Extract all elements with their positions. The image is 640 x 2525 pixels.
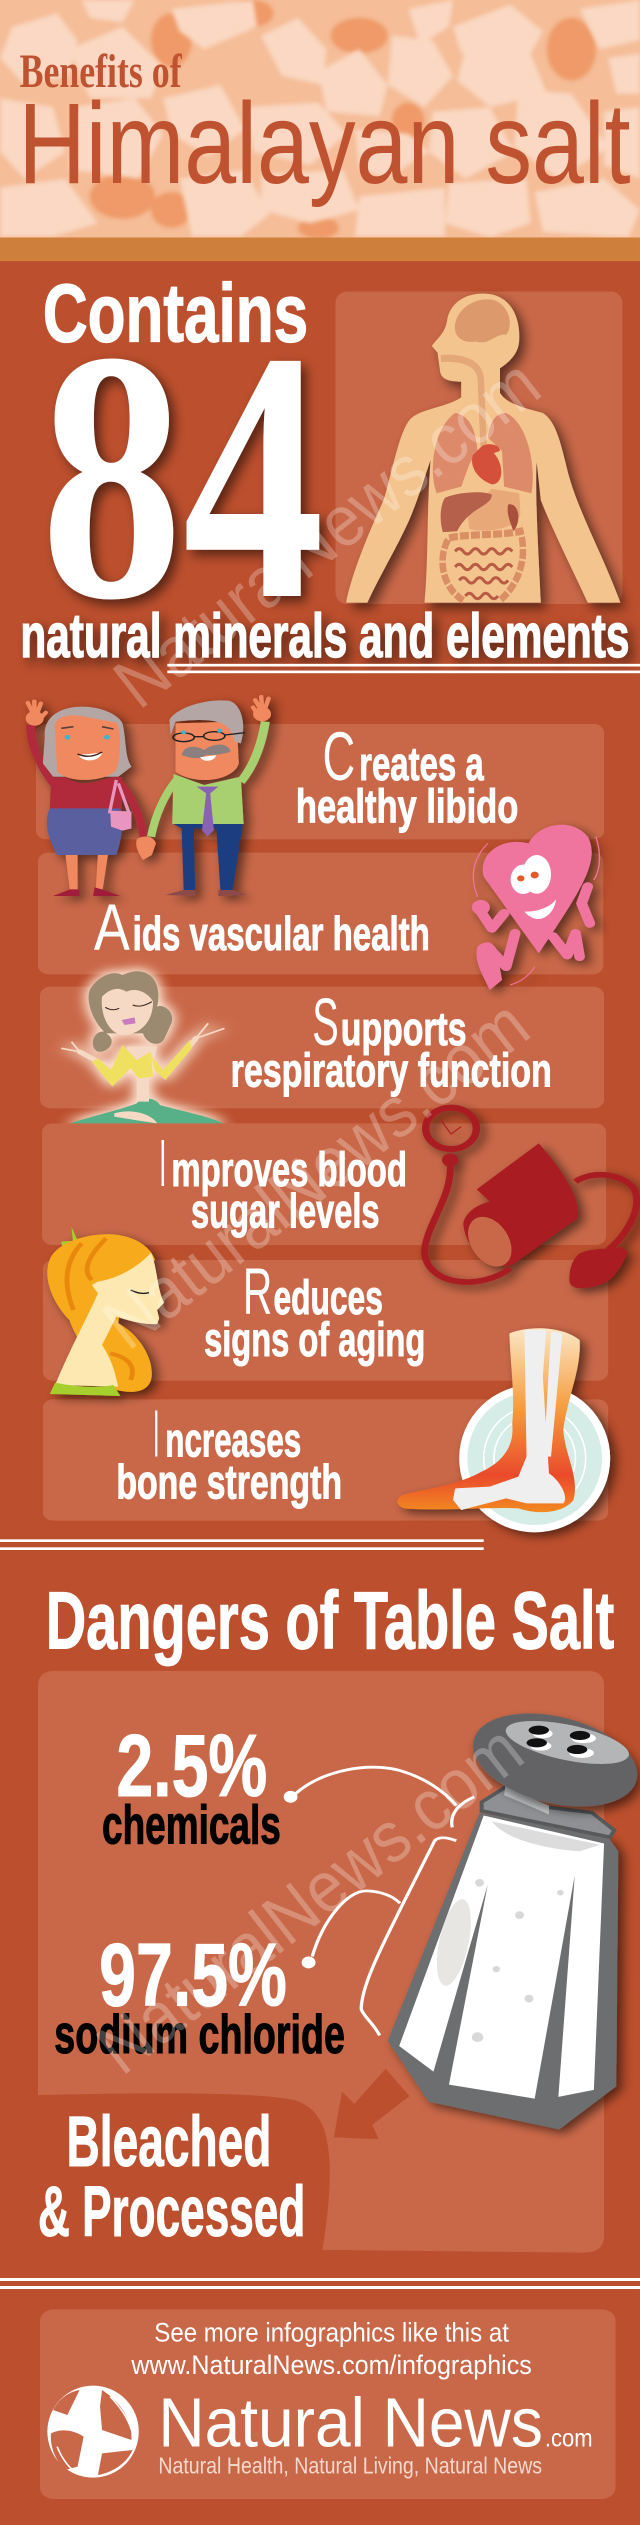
- watermark 3: NaturalNews.com: [83, 1710, 538, 2090]
- text: Supports respiratory function: upports: [341, 1003, 467, 1056]
- text: Aids vascular health: A: [94, 891, 130, 964]
- panel: respiratory row: [40, 987, 604, 1108]
- panel: dangers backdrop: [38, 1671, 604, 2253]
- footer section: [0, 2102, 640, 2499]
- text: Reduces signs of aging: [204, 1254, 425, 1367]
- text: Bleached: Bleached: [67, 2102, 271, 2181]
- stat: 2.5% chemicals: [102, 1717, 281, 1855]
- panel: aging row: [43, 1260, 608, 1381]
- panel: blood sugar row: [42, 1123, 606, 1245]
- title: Benefits of: Benefits of: [20, 45, 182, 97]
- benefit rows, part two: [0, 1108, 637, 1550]
- panel: bone row: [43, 1399, 608, 1521]
- text: Increases bone strength: [116, 1397, 342, 1509]
- stat: 97.5% sodium chloride: 97.5%: [99, 1924, 287, 2025]
- stat: 2.5% chemicals: 2.5%: [116, 1717, 267, 1815]
- icon: meditating woman: [61, 971, 227, 1127]
- text: Supports respiratory function: S: [312, 985, 339, 1059]
- text: Improves blood sugar levels: sugar levels: [191, 1183, 380, 1238]
- panel: vascular row: [38, 853, 603, 974]
- panel: libido row: [36, 724, 604, 839]
- text: Reduces signs of aging: R: [243, 1254, 272, 1328]
- watermark 2: NaturalNews.com: [89, 985, 544, 1365]
- text: Increases bone strength: ncreases: [165, 1413, 301, 1467]
- section: dangers of table salt: [38, 1575, 640, 2253]
- icon: salt shaker: [388, 1697, 640, 2129]
- text: Increases bone strength: I: [153, 1397, 160, 1471]
- text: Creates a healthy libido: [296, 719, 518, 833]
- stat: 97.5% sodium chloride: sodium chloride: [54, 2004, 345, 2065]
- icon: foot bones on plate: [397, 1328, 610, 1532]
- benefit rows, part one: [26, 697, 604, 1127]
- icon: blood pressure cuff: [424, 1108, 637, 1288]
- text: Supports respiratory function: [231, 985, 552, 1097]
- text: Improves blood sugar levels: I: [159, 1126, 167, 1200]
- text: Aids vascular health: [94, 891, 430, 964]
- text: Reduces signs of aging: signs of aging: [204, 1312, 425, 1367]
- big number 84: 84: [41, 279, 324, 674]
- stat: 97.5% sodium chloride: [54, 1924, 345, 2065]
- text: Improves blood sugar levels: [159, 1126, 407, 1238]
- text: See more infographics: See more infographics like this at: [154, 2318, 510, 2348]
- text: website URL: www.NaturalNews.com/infographics: [131, 2351, 532, 2380]
- text: Creates a healthy libido: reates a: [359, 738, 484, 791]
- orange band under header: [0, 238, 640, 261]
- heading: Contains: Contains: [43, 266, 308, 359]
- text: Reduces signs of aging: educes: [273, 1270, 383, 1325]
- header: salt crystal texture: [0, 0, 640, 674]
- icon: Natural News globe logo: [47, 2386, 139, 2478]
- logo .com: .com: [545, 2423, 593, 2452]
- arrow pointing to Bleached text: [334, 2069, 409, 2139]
- text: & Processed: & Processed: [38, 2172, 305, 2251]
- text: Increases bone strength: bone strength: [116, 1454, 342, 1509]
- callout lines to shaker: [285, 1767, 474, 2035]
- icon: smiling couple waving: [26, 697, 271, 896]
- watermark 1: NaturalNews.com: [100, 344, 555, 724]
- panel: footer: [40, 2309, 616, 2499]
- stat: 2.5% chemicals: chemicals: [102, 1795, 281, 1855]
- text: Creates a healthy libido: C: [322, 719, 355, 795]
- icon: human body with organs: [346, 294, 620, 603]
- icon: running heart: [472, 825, 600, 990]
- panel: body illustration backdrop: [336, 292, 622, 604]
- icon: woman in profile with orange hair: [47, 1227, 164, 1396]
- text: Improves blood sugar levels: mproves blood: [171, 1142, 407, 1197]
